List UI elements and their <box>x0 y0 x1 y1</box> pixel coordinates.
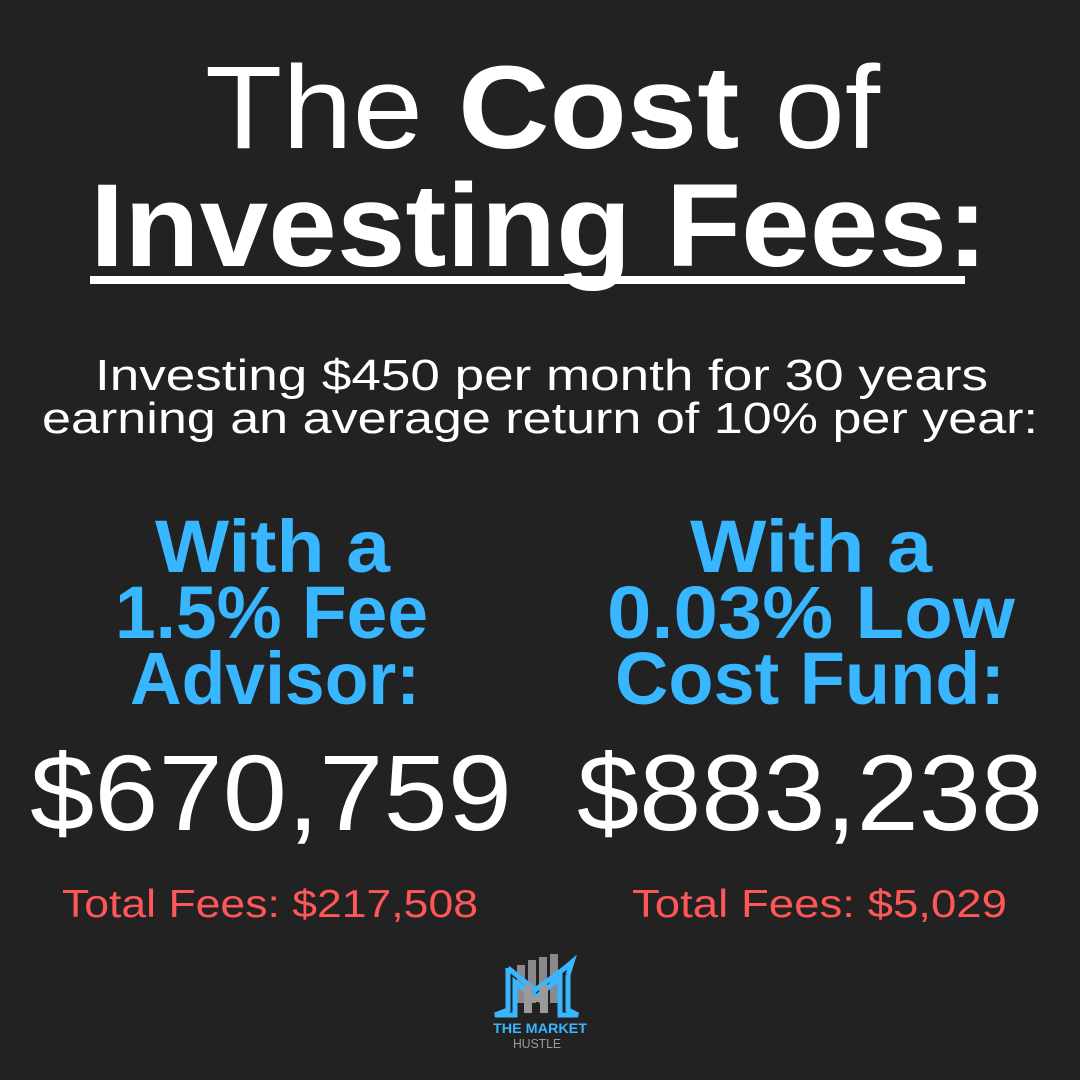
fund fees: Total Fees: $5,029 <box>632 883 1007 926</box>
fund heading <box>607 505 1015 720</box>
subtitle: Investing $450 per month for 30 years <box>95 351 988 400</box>
fund heading: Cost Fund: <box>615 637 1005 720</box>
advisor heading: Advisor: <box>130 637 420 720</box>
logo: HUSTLE <box>513 1036 561 1051</box>
advisor heading: With a <box>155 505 391 588</box>
subtitle <box>42 351 1038 443</box>
advisor heading <box>115 505 428 720</box>
advisor heading: 1.5% Fee <box>115 571 428 654</box>
fund heading: 0.03% Low <box>607 571 1015 654</box>
title: Investing Fees: <box>90 160 988 292</box>
panel: advisor <box>30 505 512 926</box>
logo <box>493 954 587 1051</box>
advisor fees: Total Fees: $217,508 <box>62 883 478 926</box>
advisor value: $670,759 <box>30 732 512 853</box>
panel: low cost fund <box>577 505 1043 926</box>
logo: THE MARKET <box>493 1020 587 1036</box>
fund heading: With a <box>690 505 933 588</box>
fund value: $883,238 <box>577 732 1043 853</box>
subtitle: earning an average return of 10% per year: <box>42 394 1038 443</box>
title <box>90 42 988 292</box>
title: The Cost of <box>205 42 880 174</box>
